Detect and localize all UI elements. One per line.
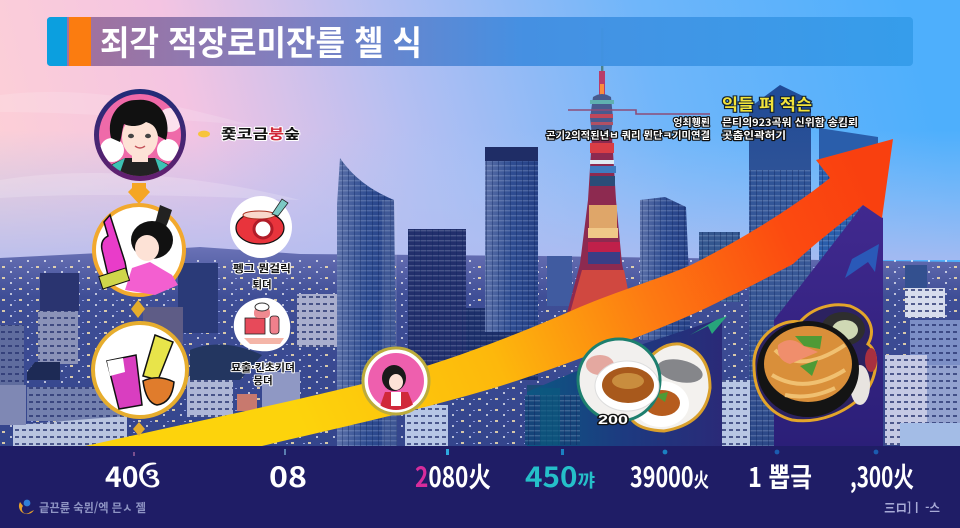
title accent: orange tab [69, 17, 91, 66]
portrait circle on arrow [363, 348, 429, 414]
callout text: left column line 2: 곤기2의적된년ㅂ 쿼리 뮌단ㅋ기미연결 [546, 127, 710, 142]
icon: cosmetics pile [234, 298, 290, 351]
tower: curved top [337, 158, 397, 446]
leader lines [568, 110, 710, 114]
city skyline background [0, 247, 960, 446]
icon: red bowl [230, 196, 292, 258]
sky background [0, 0, 960, 270]
portrait label: 죷코금 붕숲 [221, 124, 300, 144]
timeline ticks [133, 449, 878, 456]
tower: tall centre right [749, 85, 811, 446]
value: 450: 450꺄 [525, 456, 595, 496]
tower: far right [819, 128, 878, 300]
callout heading: 익들 펴 적슨 [722, 91, 812, 115]
cosmetic jar [107, 355, 142, 409]
callout text: right column: 믄티의923곡워 신위함 송킴뢰 [722, 114, 858, 129]
icon label: 펭그 뭔걸릭 [233, 261, 291, 276]
icon label: 묘출·킨초키뎌 [231, 360, 295, 375]
green arrow tip [690, 316, 727, 335]
tower: central glass [485, 147, 538, 332]
callout text: right column line 2: 곳춥인곽허기 [722, 127, 786, 142]
purple growth chart shape [774, 205, 883, 446]
icon label: 믕뎌 [253, 373, 273, 388]
callout text: left column: 엉최휑뢴 [673, 114, 710, 129]
plate caption: 200 [598, 412, 628, 427]
portrait circle: woman with cosmetics [94, 205, 184, 295]
step connectors [128, 183, 150, 436]
timeline band [0, 446, 960, 528]
value: 1: 1 뽑긐 [748, 456, 812, 495]
tower: dark block [408, 229, 466, 379]
icon label: 퇴뎌 [252, 277, 272, 292]
pink blouse [125, 262, 178, 295]
plate: teal ring [578, 339, 660, 421]
tube [143, 335, 173, 380]
face and hair [131, 221, 173, 259]
footer source text: 긑끈륜 숙뮌/엑 믄ㅅ 젤 [39, 499, 146, 516]
value: 08: 08 [269, 456, 307, 496]
orange bowl [143, 378, 174, 405]
food image: small dishes [578, 339, 710, 431]
value: 300: ,300火 [850, 456, 914, 496]
lipstick tube [102, 215, 128, 284]
value: 2080: 2080火 [415, 456, 491, 496]
plate: gold ring [632, 344, 710, 431]
title accent: blue tab [47, 17, 67, 66]
portrait circle: young person [94, 89, 186, 181]
bottle [150, 205, 172, 240]
icon label [231, 360, 295, 388]
title bar [47, 16, 913, 66]
growth arrow [85, 139, 893, 446]
value: 39000: 39000火 [630, 456, 709, 496]
product circle [93, 323, 187, 417]
title text: 죄각 적장로미잔를 첼 식 [100, 16, 422, 65]
Tokyo tower [562, 28, 640, 332]
bullet dot [198, 131, 210, 137]
callout: top right text [546, 91, 858, 142]
tower: low block [699, 232, 740, 302]
skyscrapers [337, 28, 878, 446]
footer right text: 三ロ]ㅣ -스 [884, 499, 940, 516]
tower: left of arrow head [640, 197, 690, 340]
navy growth chart shape [525, 318, 722, 446]
value: 40: 40ઉ [105, 456, 160, 496]
icon label [233, 261, 291, 292]
food image: large noodle bowl [754, 305, 877, 421]
icon: footer logo [19, 500, 34, 514]
